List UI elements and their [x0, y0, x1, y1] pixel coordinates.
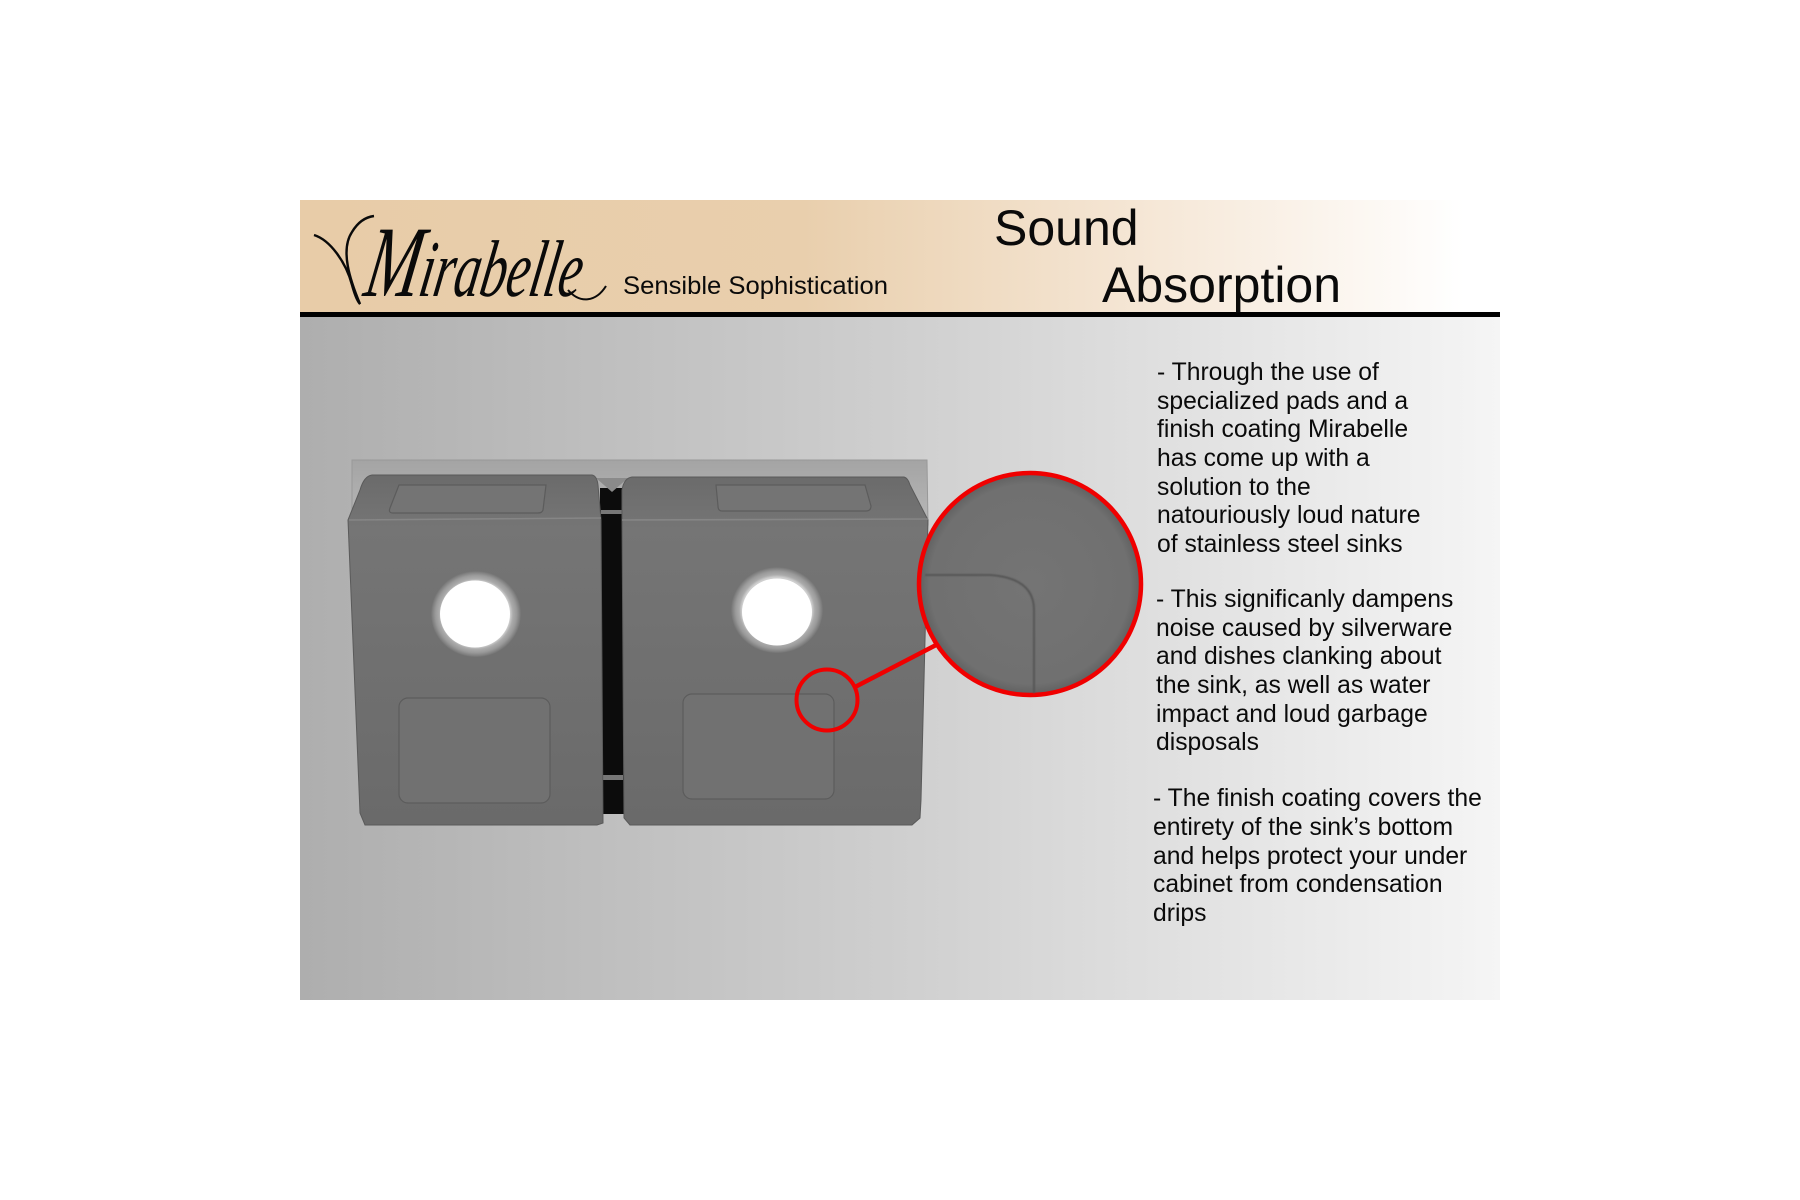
text block 2: the sink, as well as water: [1156, 672, 1430, 699]
tagline: Sensible Sophistication: [623, 272, 888, 300]
text block 3: cabinet from condensation: [1153, 871, 1443, 898]
enlarged lens: [919, 473, 1141, 695]
right drain hole: [731, 567, 823, 653]
sink illustration: [348, 460, 928, 825]
text block 3: entirety of the sink’s bottom: [1153, 814, 1453, 841]
main gray panel: [300, 317, 1500, 1000]
text block 3: [1153, 785, 1482, 927]
logo: Mirabelle signature: Mirabelle: [357, 206, 594, 318]
connector line: [855, 644, 938, 687]
text block 2: impact and loud garbage: [1156, 701, 1428, 728]
text block 1: natouriously loud nature: [1157, 502, 1421, 529]
text block 2: noise caused by silverware: [1156, 615, 1452, 642]
small circle marker: [796, 670, 858, 730]
right bowl bottom pad: [683, 694, 834, 799]
right bowl: [622, 477, 928, 825]
text block 2: [1156, 586, 1453, 756]
sink back plate: [352, 460, 928, 525]
text block 1: [1157, 359, 1421, 558]
title: [994, 200, 1341, 313]
title: Sound: [994, 200, 1139, 256]
text block 3: - The finish coating covers the: [1153, 785, 1482, 812]
title: Absorption: [1102, 257, 1341, 313]
right bowl top pad: [716, 485, 871, 511]
text block 1: of stainless steel sinks: [1157, 531, 1403, 558]
left bowl top pad: [389, 485, 546, 513]
text block 1: finish coating Mirabelle: [1157, 416, 1408, 443]
center gap between bowls: [596, 478, 628, 814]
magnifier callout: [796, 473, 1141, 730]
text block 1: specialized pads and a: [1157, 388, 1408, 415]
text block 2: - This significanly dampens: [1156, 586, 1453, 613]
text block 2: and dishes clanking about: [1156, 643, 1442, 670]
header band: [300, 200, 1500, 317]
text block 3: and helps protect your under: [1153, 843, 1467, 870]
text block 1: - Through the use of: [1157, 359, 1379, 386]
left drain hole: [431, 571, 521, 657]
text block 2: disposals: [1156, 729, 1259, 756]
text block 1: solution to the: [1157, 474, 1311, 501]
left bowl: [348, 475, 603, 825]
text block 3: drips: [1153, 900, 1207, 927]
text block 1: has come up with a: [1157, 445, 1370, 472]
left bowl bottom pad: [399, 698, 550, 803]
